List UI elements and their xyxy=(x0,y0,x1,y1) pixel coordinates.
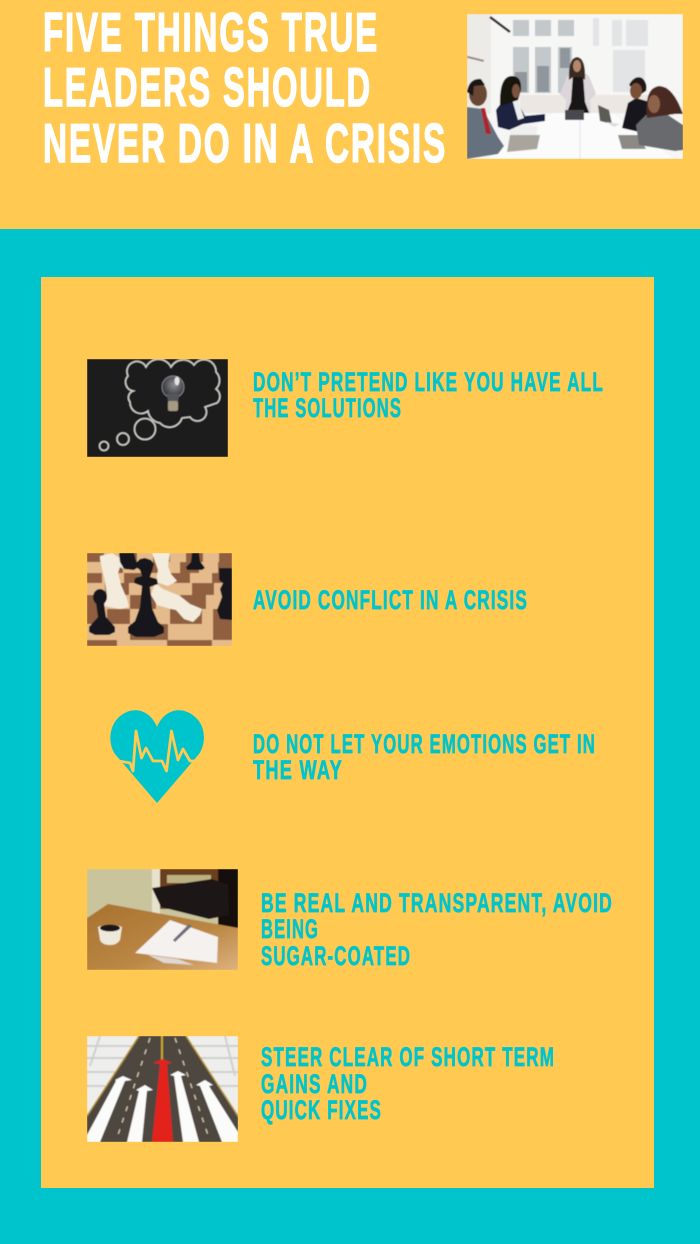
item 1 text xyxy=(253,367,604,423)
standing presenter xyxy=(560,57,596,115)
title: LEADERS SHOULD xyxy=(43,56,372,118)
title: NEVER DO IN A CRISIS xyxy=(43,112,447,174)
white pieces xyxy=(100,553,202,622)
item 5 text: QUICK FIXES xyxy=(261,1095,382,1125)
black pieces xyxy=(89,553,232,637)
photo: business meeting xyxy=(467,14,683,159)
panel: list xyxy=(41,277,654,1188)
item 4 text xyxy=(261,888,613,971)
meeting table xyxy=(583,112,592,116)
header band xyxy=(0,0,700,229)
bulb xyxy=(162,376,184,398)
seated attendees xyxy=(467,76,683,159)
item 5 text xyxy=(261,1042,555,1125)
item 1 image: chalk thought bubble with light bulb xyxy=(87,359,228,457)
white arrows xyxy=(87,1071,238,1142)
title xyxy=(43,1,447,174)
item 5 image: road with arrows xyxy=(87,1036,238,1142)
item 3 text xyxy=(253,729,596,785)
item 1 text: THE SOLUTIONS xyxy=(253,393,402,423)
item 3 text: THE WAY xyxy=(253,755,343,785)
red arrow xyxy=(152,1059,173,1142)
item 5 text: GAINS AND xyxy=(261,1069,368,1099)
item 4 image: desk with coffee and papers xyxy=(87,869,238,970)
item 2 image: chess board xyxy=(87,553,232,646)
item 3 icon: heart with pulse line xyxy=(110,710,204,803)
title: FIVE THINGS TRUE xyxy=(43,1,379,63)
item 4 text: BEING xyxy=(261,914,319,944)
item 2 text: AVOID CONFLICT IN A CRISIS xyxy=(253,585,528,615)
item 4 text: SUGAR-COATED xyxy=(261,941,411,971)
